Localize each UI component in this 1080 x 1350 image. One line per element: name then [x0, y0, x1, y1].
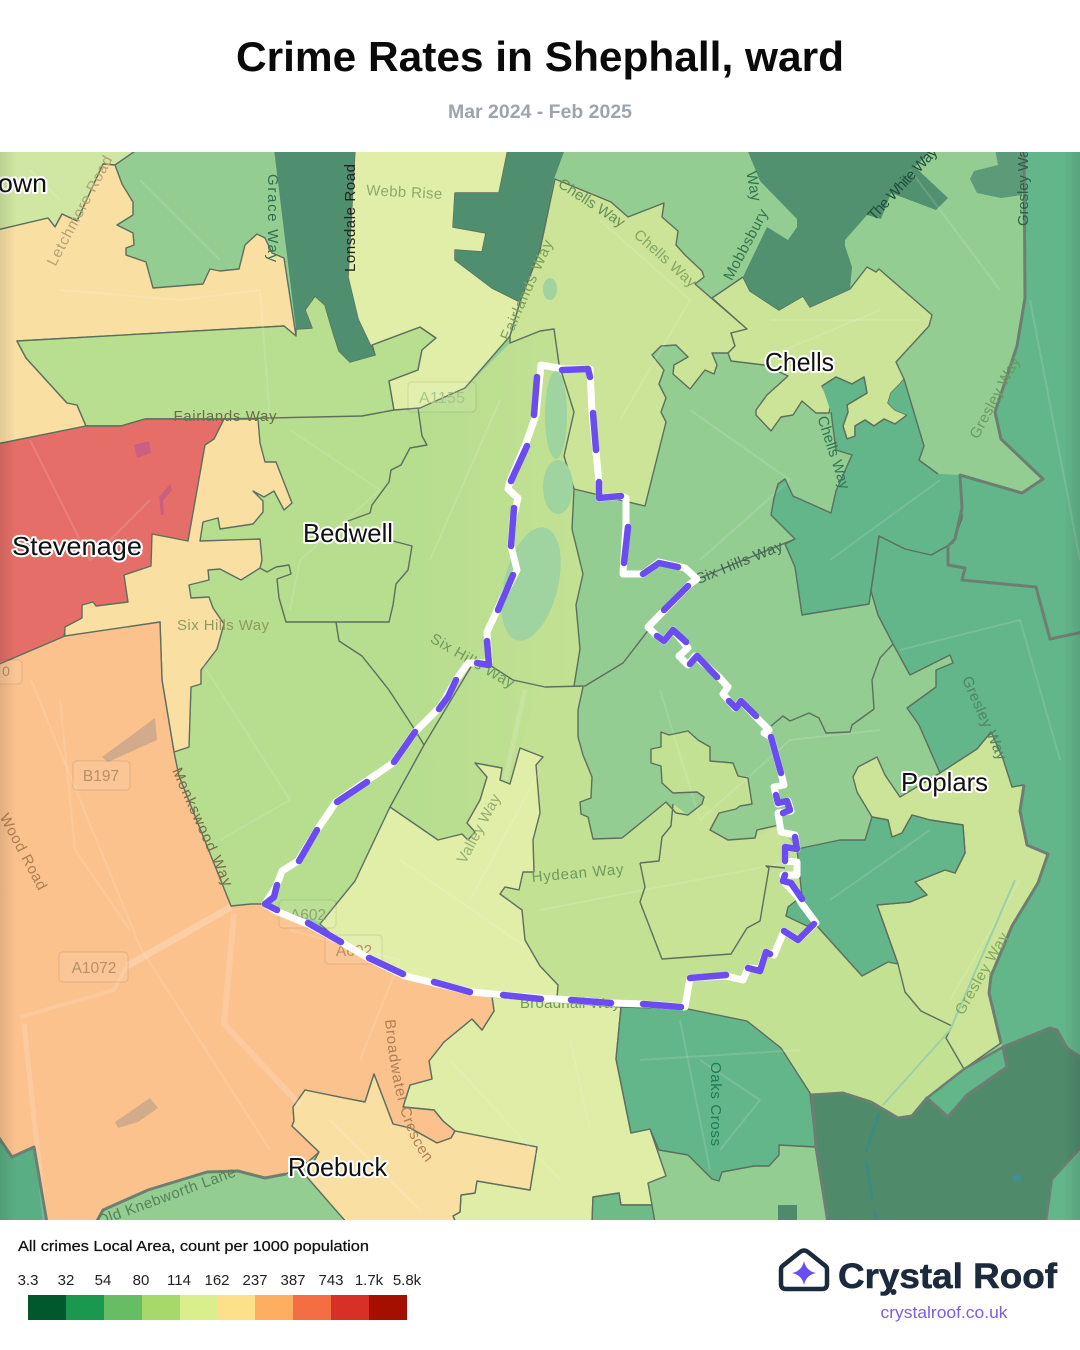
- area: south east corner teal: [1047, 1147, 1080, 1223]
- place label: Roebuck: Roebuck: [288, 1152, 388, 1182]
- area: Webb Rise pale yellow: [348, 149, 520, 410]
- area: small dark stub: [778, 1205, 797, 1223]
- road names: Fairlands Way: [174, 408, 277, 425]
- road shield: A1155: [408, 382, 476, 412]
- place label: Stevenage: Stevenage: [12, 531, 142, 561]
- area: west orange: [0, 622, 494, 1223]
- road names: Valley Way: [454, 791, 505, 866]
- area: dark north east corner: [970, 149, 1024, 198]
- area: top left pale green: [0, 149, 138, 230]
- area: Stevenage red: [0, 419, 224, 665]
- road names: Six Hills Way: [693, 538, 786, 588]
- road shield: A602 second: [325, 935, 382, 964]
- legend: [18, 1238, 422, 1320]
- legend values: 743: [318, 1272, 344, 1289]
- area: east teal block at Poplars: [797, 815, 965, 976]
- road names: Gresley Way: [966, 354, 1024, 442]
- road names: Way: [742, 170, 764, 203]
- area: Chells east yellow green: [712, 267, 932, 439]
- legend values: 162: [204, 1272, 230, 1289]
- area: central pale orange: [64, 419, 292, 752]
- legend values: 5.8k: [393, 1272, 422, 1289]
- road names: Hydean Way: [531, 861, 625, 886]
- legend values: 80: [133, 1272, 149, 1289]
- park lakes: [491, 278, 573, 647]
- area: Fairlands band green: [17, 296, 436, 426]
- map panel: crime rate choropleth: [0, 152, 1080, 1220]
- road names: Chells Way: [813, 414, 853, 492]
- area: dark block west of Chells Way: [453, 149, 565, 302]
- road names: Broadhall Way: [520, 995, 620, 1012]
- boundary lines: [0, 149, 1080, 1223]
- red area building patches: [134, 441, 172, 515]
- legend values: 3.3: [18, 1272, 38, 1289]
- legend colour scale: [28, 1295, 407, 1320]
- legend values: 1.7k: [355, 1272, 384, 1289]
- area: north west pale orange: [0, 164, 296, 444]
- road shield: A1155: A1155: [419, 390, 465, 407]
- legend values: 387: [280, 1272, 306, 1289]
- area: Valley Way pale yellow: [320, 748, 558, 998]
- area: Poplars yellow green: [853, 732, 1048, 1069]
- area: inner block near Hydean Way: [640, 804, 785, 959]
- ward boundary: Shephall: [265, 365, 816, 1007]
- area: central west mid green: [174, 329, 592, 1000]
- road names: Gresley Way: [952, 929, 1013, 1018]
- area: south west teal corner: [0, 1135, 47, 1223]
- grey ponds: [102, 718, 158, 1128]
- road names: Lonsdale Road: [342, 164, 359, 272]
- road shield: clipped left: [0, 660, 22, 684]
- road names: Monkswood Way: [168, 765, 236, 890]
- area: dark strip at Lonsdale Road: [274, 149, 375, 362]
- legend values: 32: [58, 1272, 74, 1289]
- area: small teal sliver: [786, 900, 812, 926]
- road names: Letchmore Road: [44, 153, 116, 269]
- road names: Grace Way: [264, 174, 281, 262]
- road names: Oaks Cross: [707, 1062, 724, 1146]
- legend values: 237: [242, 1272, 268, 1289]
- legend values: 54: [95, 1272, 111, 1289]
- road shield: A602: [279, 900, 336, 928]
- legend values: [18, 1272, 422, 1289]
- road names: Chells Way: [630, 226, 700, 291]
- place label: Chells: Chells: [765, 347, 834, 377]
- railway corridor: [883, 880, 1015, 1105]
- area: south east dark woodland: [812, 1028, 1080, 1223]
- area: Roebuck pale orange: [292, 1074, 537, 1223]
- area: small teal south: [592, 1193, 655, 1223]
- area: south east teal wedge: [927, 1047, 1007, 1117]
- title: [236, 33, 844, 123]
- river: [865, 1114, 879, 1220]
- road shield: B197: B197: [83, 768, 119, 785]
- date range subtitle: Mar 2024 - Feb 2025: [448, 102, 632, 123]
- road names: Six Hills Way: [427, 630, 518, 692]
- road names: Six Hills Way: [177, 617, 270, 634]
- area: south pale yellow: [403, 997, 666, 1223]
- area: east teal: [771, 149, 1080, 1059]
- place label: Bedwell: Bedwell: [303, 518, 393, 548]
- heading: Crime Rates in Shephall, ward: [236, 33, 844, 80]
- area: Oaks Cross teal: [616, 1007, 816, 1181]
- road shield: A1072: [59, 952, 128, 982]
- legend title: All crimes Local Area, count per 1000 population: [18, 1238, 369, 1255]
- pond: [1012, 1174, 1022, 1182]
- road names: Mobbsbury: [720, 206, 772, 283]
- road names: Fairlands Way: [497, 237, 557, 343]
- area: central south yellow green: [500, 687, 964, 1118]
- area: Chells west yellow green: [510, 179, 747, 506]
- place label: Poplars: Poplars: [901, 767, 988, 797]
- icon: house with star: [781, 1250, 827, 1289]
- road shield: B197: [73, 761, 130, 790]
- legend values: 114: [167, 1272, 191, 1289]
- area: dark north woodland: [743, 149, 948, 310]
- road shield: A602 second: A602: [336, 943, 372, 960]
- road shield: A1072: A1072: [72, 960, 116, 977]
- logo: Crystal Roof: [778, 1248, 1058, 1322]
- road shield: A602: A602: [290, 907, 326, 924]
- road names: Webb Rise: [366, 182, 443, 203]
- road shield: clipped left: 0: [2, 663, 10, 679]
- brand name: Crystal Roof: [838, 1257, 1057, 1296]
- road names: Chells Way: [555, 175, 628, 231]
- road names: Gresley Way: [958, 674, 1010, 763]
- website: crystalroof.co.uk: [880, 1304, 1008, 1322]
